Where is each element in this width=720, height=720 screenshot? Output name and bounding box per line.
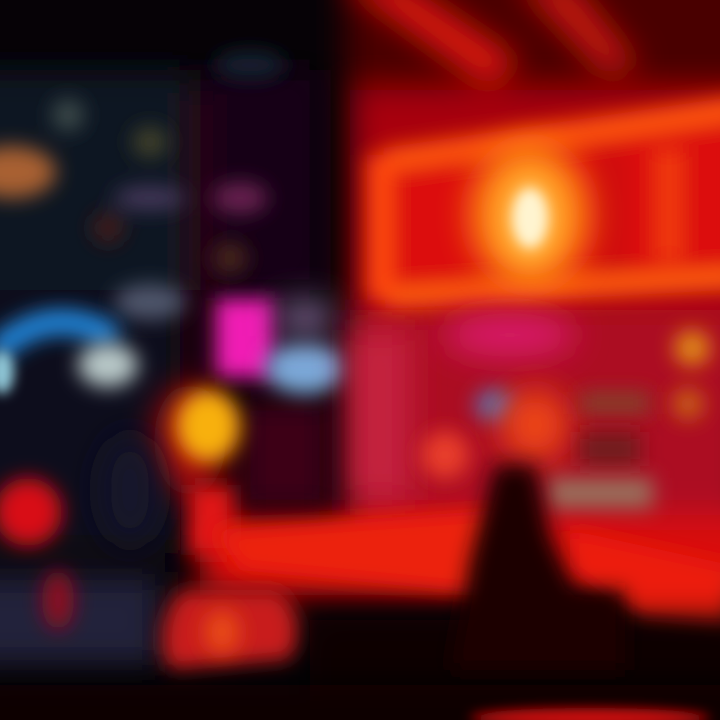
left wall lights	[0, 51, 286, 320]
red counter	[215, 510, 720, 630]
yellow lamp and red lamps	[0, 384, 240, 555]
sign glow	[470, 143, 590, 287]
blue arc and pink panel	[0, 298, 345, 394]
red bottom glow	[470, 708, 710, 720]
ceiling beams	[340, 0, 640, 90]
pink haze and shelves	[350, 313, 710, 508]
panel: dark left wall	[0, 70, 330, 665]
panel: red right wall	[200, 0, 720, 595]
neon sign frame	[380, 105, 720, 300]
dark foreground silhouette	[0, 465, 720, 720]
floor glow	[42, 570, 300, 672]
